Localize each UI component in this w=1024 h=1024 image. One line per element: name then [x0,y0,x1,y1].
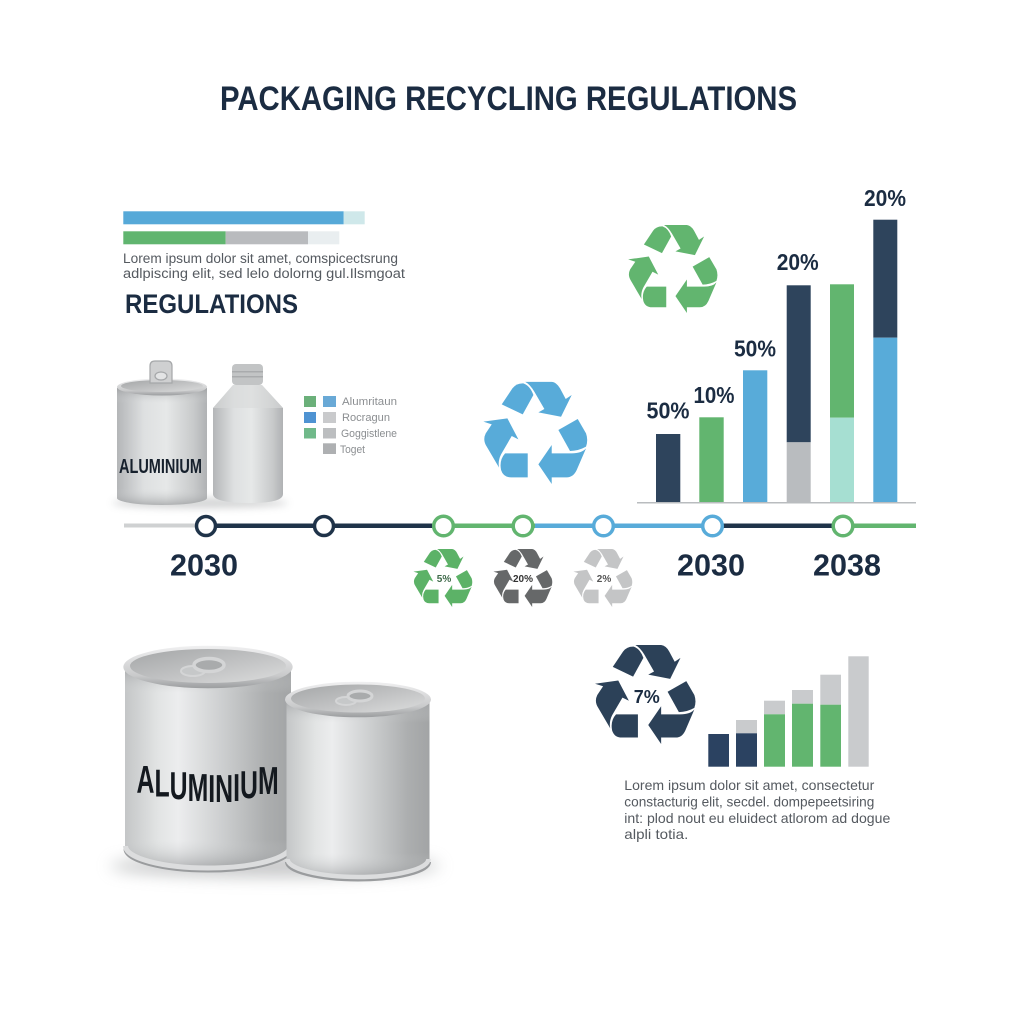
bar value labels: 50% [734,336,776,362]
icon: navy recycle symbol 7% [595,645,695,744]
icon: small light grey recycle symbol 2% [573,549,632,607]
bottle [213,364,283,503]
bar value labels: 10% [694,382,734,408]
bar value labels: 20% [864,185,906,211]
pull tab [336,691,372,705]
icon: small dark grey recycle symbol 20% [493,549,552,607]
icon: green recycle symbol [628,225,717,313]
icon: small light grey recycle symbol 2%: 2% [597,574,611,585]
progress bar: green and grey [123,231,339,244]
legend: Goggistlene [341,428,397,440]
title: PACKAGING RECYCLING REGULATIONS [220,80,797,118]
summary text: adlpiscing elit, sed lelo dolorng gul.Ilsmgoat [123,266,405,281]
icon: navy recycle symbol 7%: 7% [634,687,660,707]
timeline years: 2030 [677,548,745,582]
bar 2 [699,417,724,503]
bar value labels: 20% [777,249,819,275]
can label: ALUMINIUM [136,757,279,810]
regulations heading: REGULATIONS [125,289,298,319]
summary text: Lorem ipsum dolor sit amet, comspicectsrung [123,251,398,266]
timeline nodes [196,516,853,536]
icon: small green recycle symbol 5% [413,549,472,607]
bar value labels: 50% [646,398,690,424]
bar value labels [646,185,906,424]
can: ALUMINIUM [119,456,202,478]
icon: small dark grey recycle symbol 20%: 20% [513,574,533,585]
timeline [124,516,916,582]
icon: small green recycle symbol 5%: 5% [437,574,451,585]
bar 5 [830,284,854,503]
description text: int: plod nout eu eluidect atlorom ad dogue [624,810,891,826]
timeline years: 2030 [170,548,238,582]
progress bar: blue [123,211,365,224]
bar 3 [743,370,767,503]
summary text [123,251,405,281]
description text [624,777,891,842]
legend: Toget [340,444,365,456]
illustration: small can and bottle [112,361,288,508]
legend [304,396,397,456]
pull tab [181,658,224,676]
timeline years [170,548,881,582]
large can [123,646,293,871]
illustration: large aluminium cans [110,646,440,880]
bar 4 [787,285,811,503]
description text: constacturig elit, secdel. dompepeetsiring [624,794,874,810]
bar 6 [873,220,897,503]
icon: blue recycle symbol [483,382,587,484]
panel: regulations summary [123,211,405,319]
legend: Rocragun [342,412,390,424]
can [117,361,207,505]
bar chart: small stacked bars [708,656,869,767]
description text: alpli totia. [624,826,688,842]
description text: Lorem ipsum dolor sit amet, consectetur [624,777,875,793]
legend: Alumritaun [342,396,397,408]
smaller can [285,682,431,880]
timeline years: 2038 [813,548,881,582]
bar chart: yearly targets [637,185,916,504]
bar 1 [656,434,680,503]
